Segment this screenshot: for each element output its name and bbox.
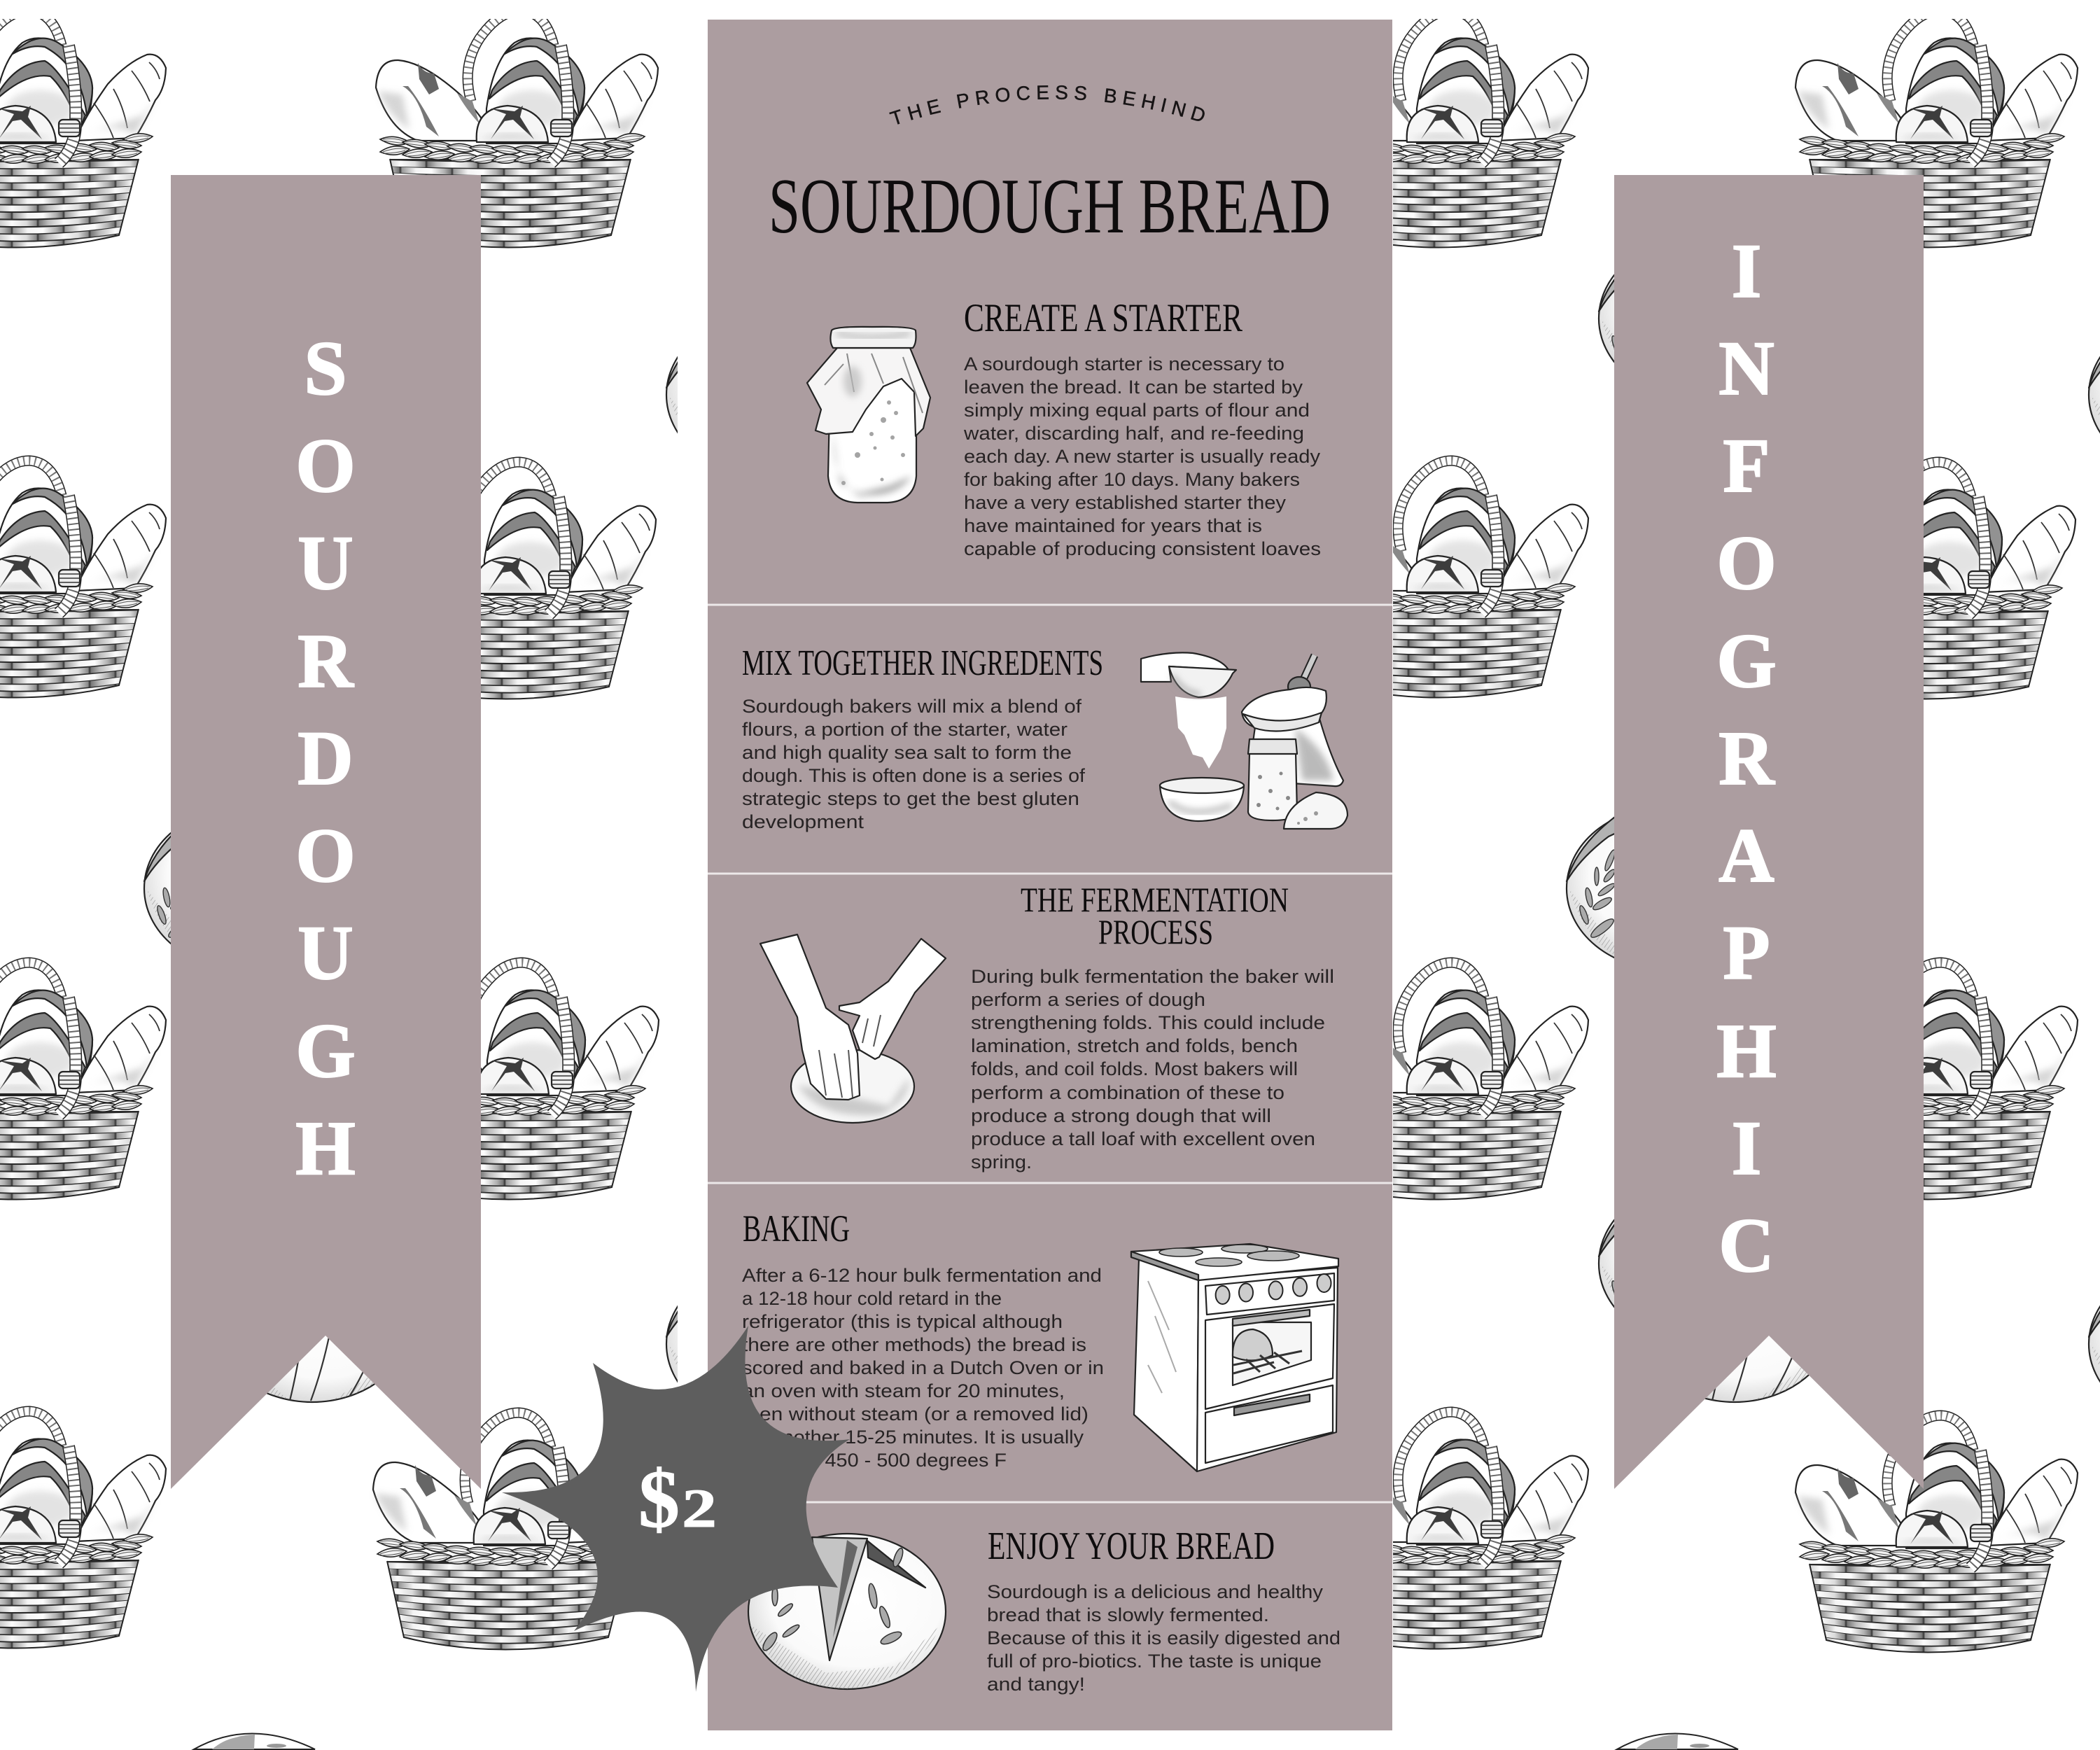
body text: spring. [971, 1152, 1032, 1172]
right ribbon banner: INFOGRAPHIC: G [1716, 618, 1777, 704]
section: fermentation process [760, 880, 1334, 1172]
right ribbon banner: INFOGRAPHIC: O [1716, 520, 1777, 606]
heading: ENJOY YOUR BREAD [988, 1525, 1275, 1568]
body text: perform a combination of these to [971, 1082, 1284, 1103]
left ribbon banner: SOURDOUGH: H [295, 1105, 356, 1191]
body text: development [742, 811, 864, 832]
left ribbon banner: SOURDOUGH: G [295, 1008, 356, 1093]
price starburst badge: 2 [682, 1478, 717, 1539]
body text: perform a series of dough [971, 989, 1205, 1010]
icon: oven [1131, 1244, 1338, 1471]
body text: flours, a portion of the starter, water [742, 719, 1068, 740]
heading: BAKING [743, 1208, 850, 1250]
right ribbon banner: INFOGRAPHIC [1614, 175, 1924, 1489]
body text: Sourdough is a delicious and healthy [987, 1581, 1324, 1602]
icon: hands kneading dough [760, 934, 946, 1123]
heading [1021, 880, 1289, 951]
body text: Because of this it is easily digested and [987, 1628, 1340, 1648]
body text: water, discarding half, and re-feeding [963, 423, 1304, 444]
body text: baked at 450 - 500 degrees F [742, 1450, 1007, 1471]
body text: refrigerator (this is typical although [742, 1311, 1063, 1332]
body text: A sourdough starter is necessary to [964, 354, 1284, 374]
right ribbon banner: INFOGRAPHIC: N [1718, 326, 1774, 411]
body text: strategic steps to get the best gluten [742, 788, 1079, 809]
body text: for baking after 10 days. Many bakers [964, 469, 1300, 490]
heading: PROCESS [1098, 912, 1213, 951]
body text: have maintained for years that is [964, 515, 1262, 536]
background: bread basket pattern, left half [0, 10, 865, 1749]
right ribbon banner: INFOGRAPHIC: F [1723, 423, 1770, 508]
body text: and high quality sea salt to form the [742, 742, 1072, 763]
body text [742, 1265, 1104, 1471]
heading: THE FERMENTATION [1021, 880, 1289, 919]
body text: strengthening folds. This could include [971, 1012, 1325, 1033]
body text: After a 6-12 hour bulk fermentation and [742, 1265, 1102, 1286]
body text: leaven the bread. It can be started by [964, 377, 1303, 398]
icon: scored round loaf [748, 1534, 946, 1689]
right ribbon banner: INFOGRAPHIC: R [1718, 715, 1775, 801]
body text: lamination, stretch and folds, bench [971, 1035, 1298, 1056]
body text: bread that is slowly fermented. [987, 1604, 1269, 1625]
body text [987, 1581, 1340, 1695]
section: create a starter [807, 296, 1321, 559]
icon: starter jar [807, 327, 930, 503]
price starburst badge: $ [638, 1453, 680, 1545]
left ribbon banner: SOURDOUGH: O [295, 813, 356, 898]
heading: CREATE A STARTER [964, 296, 1242, 340]
body text [742, 696, 1086, 832]
body text: a 12-18 hour cold retard in the [742, 1288, 1002, 1309]
body text: full of pro-biotics. The taste is unique [987, 1651, 1322, 1672]
heading: MIX TOGETHER INGREDENTS [742, 643, 1103, 683]
body text: scored and baked in a Dutch Oven or in [742, 1357, 1104, 1378]
right ribbon banner: INFOGRAPHIC: A [1718, 813, 1774, 898]
body text: each day. A new starter is usually ready [964, 446, 1321, 467]
body text: for another 15-25 minutes. It is usually [742, 1427, 1084, 1448]
curved kicker: the process behind: THE PROCESS BEHIND [889, 85, 1205, 125]
left ribbon banner: SOURDOUGH: S [304, 326, 347, 411]
section dividers [708, 605, 1392, 1502]
right ribbon banner: INFOGRAPHIC: P [1723, 910, 1770, 995]
title: SOURDOUGH BREAD [769, 163, 1331, 250]
body text: folds, and coil folds. Most bakers will [971, 1058, 1298, 1079]
body text: capable of producing consistent loaves [964, 538, 1321, 559]
background: bread basket pattern, right half [1306, 10, 2100, 1749]
body text: an oven with steam for 20 minutes, [742, 1380, 1065, 1401]
body text: then without steam (or a removed lid) [742, 1404, 1088, 1424]
icon: sifting flour, sack, jar and dough [1141, 652, 1348, 829]
body text: there are other methods) the bread is [742, 1334, 1086, 1355]
section: mix together ingredients [742, 643, 1348, 832]
central panel background [708, 20, 1392, 1730]
body text: Sourdough bakers will mix a blend of [742, 696, 1082, 717]
section: enjoy your bread [748, 1525, 1340, 1695]
body text: produce a tall loaf with excellent oven [971, 1128, 1315, 1149]
body text: During bulk fermentation the baker will [971, 966, 1334, 987]
right ribbon banner: INFOGRAPHIC: H [1716, 1008, 1777, 1093]
left ribbon banner: SOURDOUGH: U [298, 520, 354, 606]
body text: and tangy! [987, 1674, 1085, 1695]
body text [971, 966, 1334, 1172]
section: baking [742, 1208, 1338, 1471]
body text: simply mixing equal parts of flour and [964, 400, 1310, 421]
price starburst badge [502, 1326, 850, 1692]
body text: produce a strong dough that will [971, 1105, 1271, 1126]
left ribbon banner: SOURDOUGH: D [298, 715, 354, 801]
body text: dough. This is often done is a series of [742, 765, 1086, 786]
body text [963, 354, 1321, 559]
right ribbon banner: INFOGRAPHIC: I [1732, 1105, 1761, 1191]
left ribbon banner: SOURDOUGH: O [295, 423, 356, 508]
right ribbon banner: INFOGRAPHIC: I [1732, 228, 1761, 314]
left ribbon banner: SOURDOUGH [171, 175, 481, 1489]
left ribbon banner: SOURDOUGH: R [298, 618, 354, 704]
right ribbon banner: INFOGRAPHIC: C [1718, 1203, 1774, 1288]
body text: have a very established starter they [964, 492, 1287, 513]
left ribbon banner: SOURDOUGH: U [298, 910, 354, 995]
